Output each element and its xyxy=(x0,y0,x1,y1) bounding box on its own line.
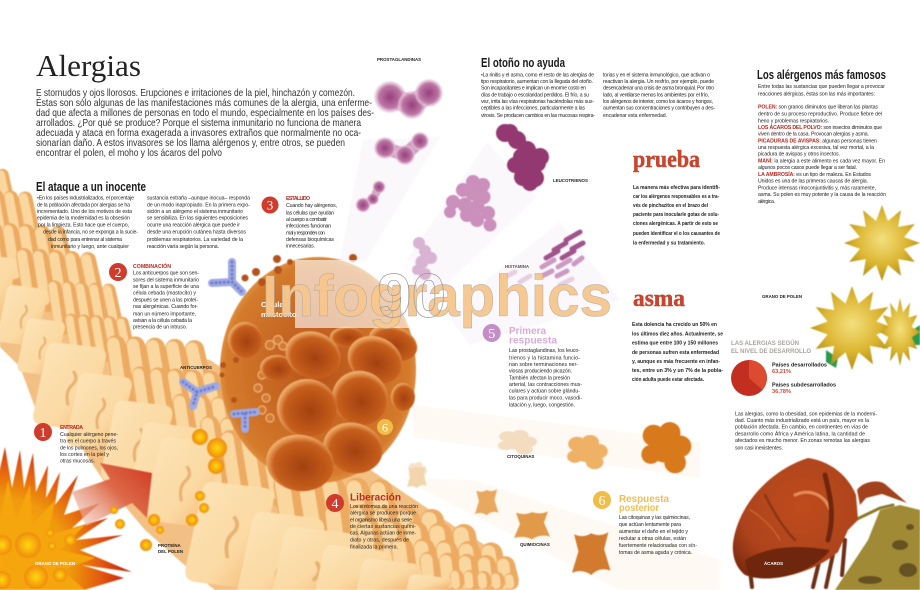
section: El ataque a un inocente: inmunitario y luego, ante cualquier xyxy=(51,244,129,250)
section: El otoño no ayuda: aumentan sus concentraciones y contribuyen a des- xyxy=(603,106,715,112)
section: Los alérgenos más famosos: dentro de su proceso reproductivo. Produce fiebre del xyxy=(758,111,882,117)
step 2: Combinación: COMBINACIÓN xyxy=(133,262,171,270)
step 5: Primera respuesta: También afectan la presión xyxy=(509,375,570,381)
section: El ataque a un inocente: ocurre una reacción alérgica que puede ir xyxy=(147,222,240,228)
pie chart xyxy=(731,360,767,396)
watermark: 90 xyxy=(377,262,446,331)
section: Los alérgenos más famosos: algunos pocos casos puede llegar a ser fatal. xyxy=(758,165,857,171)
section: pie chart by development level: son casi inexistentes. xyxy=(735,445,783,451)
step 3: Estallido: defensas bioquímicas xyxy=(286,237,334,243)
step 4: Liberación: cas. Algunas actúan de inme- xyxy=(350,531,416,537)
section: asma xyxy=(632,286,723,383)
step 3: Estallido: Cuando hay alérgenos, xyxy=(286,203,337,209)
light beams from the mast cell xyxy=(340,137,720,590)
section: El ataque a un inocente: problemas respiratorios. La variedad de la xyxy=(147,237,243,243)
step 5: Primera respuesta: nan sobre terminaciones ner- xyxy=(509,362,578,368)
label: antibodies: ANTICUERPOS xyxy=(180,365,212,370)
section: prueba: la enfermedad y su tratamiento. xyxy=(633,240,705,246)
section: Los alérgenos más famosos: alérgica. xyxy=(758,199,775,205)
section: Los alérgenos más famosos: POLEN: son granos diminutos que liberan las plantas xyxy=(758,105,878,111)
step 3: Estallido xyxy=(262,196,337,250)
intro text xyxy=(36,88,374,159)
section: prueba: pueden identificar el o los causantes de xyxy=(633,231,720,237)
section: asma: los últimos diez años. Actualmente, se xyxy=(632,332,723,338)
step 2: Combinación: célula cebada (mastocito) y xyxy=(133,291,196,297)
section: pie chart by development level: desarrollo como África y América latina, la cantidad de xyxy=(735,430,865,437)
label: right pollen grain: GRANO DE POLEN xyxy=(762,294,802,299)
step 3: Estallido: innecesarias. xyxy=(286,244,315,250)
section: El otoño no ayuda: desencadenar una crisis de asma bronquial. Por otro xyxy=(603,86,714,92)
step 5: Primera respuesta: las para producir moco, vasodi- xyxy=(509,395,582,401)
step 1: Entrada: 1 xyxy=(40,426,46,441)
step 1: Entrada: Cualquier alérgeno pene- xyxy=(60,432,118,438)
step 3: Estallido: ESTALLIDO xyxy=(286,196,310,202)
section: pie chart by development level: LAS ALERGIAS SEGÚN xyxy=(731,340,799,347)
step 3: Estallido: mal y responden con xyxy=(286,231,325,237)
section: pie chart by development level: Las alergias, como la obesidad, son epidemias de la moderni- xyxy=(735,411,877,417)
section: El otoño no ayuda: Son incapacitantes e implican un enorme costo en xyxy=(481,86,586,92)
step 4: Liberación: Los síntomas de una reacción xyxy=(350,504,418,510)
step 4: Liberación: finalizada la primera. xyxy=(350,545,398,551)
section: El ataque a un inocente: incrementado. Uno de los motivos de esta xyxy=(37,209,132,215)
section: prueba: ciones alergénicas. A partir de esto se xyxy=(633,221,718,227)
step 3: Estallido: 3 xyxy=(267,198,273,212)
section: Los alérgenos más famosos: LOS ÁCAROS DEL POLVO: son insectos diminutos que xyxy=(758,124,882,131)
step 5: Primera respuesta: arterial, las contracciones mus- xyxy=(509,382,582,388)
section: El ataque a un inocente: •En los países industrializados, el porcentaje xyxy=(37,196,134,202)
section: El ataque a un inocente: desde una erupción cutánea hasta diversos xyxy=(147,230,246,236)
section: prueba: La manera más efectiva para identifi- xyxy=(633,185,720,191)
section: pie chart by development level xyxy=(731,340,877,451)
section: Los alérgenos más famosos: viven dentro de la casa. Provocan alergias y asma. xyxy=(758,132,869,138)
section: El ataque a un inocente: reacción varía según la persona. xyxy=(147,244,219,250)
section: El otoño no ayuda: vez, irrita las vías respiratorias haciéndolas más sus- xyxy=(481,99,594,105)
label: mast cell xyxy=(261,300,297,319)
section: Los alérgenos más famosos: PICADURAS DE AVISPAS: algunas personas tienen xyxy=(758,138,877,144)
section: El otoño no ayuda: El otoño no ayuda xyxy=(481,56,566,70)
step 6: Respuesta posterior: reclutar a otras células, están xyxy=(619,536,686,542)
illustration: histamine xyxy=(503,232,583,285)
section: El otoño no ayuda: encadenar esta enfermedad. xyxy=(603,113,667,119)
section: Los alérgenos más famosos xyxy=(757,68,886,205)
section: El otoño no ayuda: días de trabajo o escolaridad perdidos. El frío, a su xyxy=(481,92,589,98)
section: asma: de personas sufren esta enfermedad xyxy=(632,350,720,356)
step 5: Primera respuesta: trienos y la histamina funcio- xyxy=(509,355,580,361)
section: Los alérgenos más famosos: reacciones alérgicas, éstas son las más importantes: xyxy=(758,92,875,98)
section: El ataque a un inocente: de la población afectada por alergias se ha xyxy=(37,202,130,208)
label: mast cell: Célula xyxy=(261,300,284,309)
label: histamine: HISTAMINA xyxy=(505,264,530,269)
step 1: Entrada: de los pulmones, los ojos, xyxy=(60,445,118,451)
label: leukotrienes: LEUCOTRIENOS xyxy=(553,178,588,183)
section: El otoño no ayuda xyxy=(481,56,715,119)
step 4: Liberación: diato y otras, después de xyxy=(350,537,409,543)
step 4: Liberación: de ciertas sustancias quími- xyxy=(350,524,416,530)
section: Los alérgenos más famosos: Produce intensas rinoconjuntivitis y, más raramente, xyxy=(758,185,876,191)
section: El otoño no ayuda: los alérgenos de interior, como los ácaros y hongos, xyxy=(603,99,713,105)
section: asma: estima que entre 100 y 150 millones xyxy=(632,340,718,346)
step 4: Liberación: alérgica se producen porque xyxy=(350,511,416,517)
illustration: leukotrienes xyxy=(412,124,549,280)
watermark: Infographics xyxy=(262,264,612,329)
step 5: Primera respuesta: 5 xyxy=(488,327,495,342)
section: El ataque a un inocente: El ataque a un inocente xyxy=(36,180,146,194)
intro text: sionarían daño. A estos invasores se los llama alérgenos y, entre otros, se pueden xyxy=(36,138,345,149)
section: prueba: car los alérgenos responsables es a tra- xyxy=(633,194,719,200)
section: El ataque a un inocente: epidemia de la modernidad es la obsesión xyxy=(37,216,130,222)
section: asma: y, aunque es más frecuente en infan- xyxy=(632,359,720,365)
title: Alergias xyxy=(36,48,141,83)
step 2: Combinación xyxy=(109,262,199,331)
step 3: Estallido: las células que ayudan xyxy=(286,210,334,216)
step 6: Respuesta posterior: 6 xyxy=(598,494,606,509)
intro text: E stornudos y ojos llorosos. Erupciones e irritaciones de la piel, hinchazón y comezón. xyxy=(36,88,355,99)
intro text: Éstas son sólo algunas de las manifestaciones más comunes de la alergia, una enferme- xyxy=(36,96,372,109)
section: pie chart by development level: 36,78% xyxy=(772,389,791,395)
section: Los alérgenos más famosos: Entre todas las sustancias que pueden llegar a provocar xyxy=(758,84,885,90)
section: El ataque a un inocente: por la limpieza. Esto hace que el cuerpo, xyxy=(38,222,129,228)
step 2: Combinación: Los anticuerpos que son sen- xyxy=(133,271,199,277)
section: El ataque a un inocente: se sensibiliza. En las siguientes exposiciones xyxy=(147,216,248,222)
step 2: Combinación: presencia de un intruso. xyxy=(133,325,187,331)
section: pie chart by development level: EL NIVEL DE DESARROLLO xyxy=(731,349,811,355)
step 4: Liberación: 4 xyxy=(332,497,338,512)
section: Los alérgenos más famosos: una respuesta alérgica excesiva, tal vez mortal, a la xyxy=(758,145,874,151)
step 2: Combinación: nas alergénicas. Cuando for- xyxy=(133,304,198,310)
intro text: encontrar el polen, el moho y los ácaros del polvo xyxy=(36,148,222,159)
section: pie chart by development level: población afectada. En cambio, en continentes en vías de xyxy=(735,425,868,431)
step 1: Entrada: otras mucosas. xyxy=(60,459,95,465)
step 4: Liberación: el organismo libera una serie xyxy=(350,517,412,523)
step 1: Entrada: tra en el cuerpo a través xyxy=(60,439,116,445)
step 6: Respuesta posterior: aumentar el daño en el tejido y xyxy=(619,529,688,535)
section: prueba: paciente para inocularle gotas de solu- xyxy=(633,212,719,218)
label: pollen protein: DEL POLEN xyxy=(158,549,183,554)
label: mast cell: mastocito xyxy=(261,310,297,319)
intro text: arrollados. ¿Por qué se produce? Porque el sistema inmunitario no funciona de manera xyxy=(36,118,361,129)
section: El otoño no ayuda: •La rinitis y el asma, como el resto de las alergias de xyxy=(481,72,594,78)
section: El otoño no ayuda: lado, al ventilarse menos los ambientes por el frío, xyxy=(603,92,709,98)
label: pollen protein xyxy=(158,543,183,554)
small step marker 6 on mast cell xyxy=(377,419,393,435)
illustration: epithelial tissue cells xyxy=(0,170,512,590)
step 2: Combinación: sores del sistema inmunitario xyxy=(133,277,199,283)
illustration: dust mite on plant xyxy=(733,458,920,590)
section: pie chart by development level: afectados es mucho menor. En zonas remotas las alergias xyxy=(735,438,870,444)
section: asma: asma xyxy=(633,286,685,312)
step 1: Entrada: ENTRADA xyxy=(60,425,83,431)
step 6: Respuesta posterior: tomas de asma aguda y crónica. xyxy=(619,550,692,556)
section: Los alérgenos más famosos: heno y problemas respiratorios. xyxy=(758,118,829,124)
section: El otoño no ayuda: virosis. Se producen cambios en las mucosas respira- xyxy=(481,113,595,119)
label: chemokines: QUIMIOCINAS xyxy=(520,542,550,547)
section: El otoño no ayuda: torias y en el sistema inmunológico, que activan o xyxy=(603,72,710,78)
section: asma: Esta dolencia ha crecido un 50% en xyxy=(632,322,718,328)
step 6: Respuesta posterior: Las citoquinas y las quimiocinas, xyxy=(619,515,690,521)
step 2: Combinación: man un número importante, xyxy=(133,311,196,317)
section: Los alérgenos más famosos: Unidos es una de las primeras causas de alergia. xyxy=(758,179,868,185)
label: pollen grain: GRANO DE POLEN xyxy=(35,561,75,566)
section: El otoño no ayuda: tipo respiratorio, aumentan con la llegada del otoño. xyxy=(481,79,593,85)
step 2: Combinación: se fijan a la superficie de una xyxy=(133,284,199,290)
step 6: Respuesta posterior: Respuesta xyxy=(619,494,669,505)
step 6: Respuesta posterior xyxy=(593,491,697,556)
section: El ataque a un inocente: desde la infancia, no se exponga a la sucie- xyxy=(43,230,138,236)
section: asma: tes, entre un 3% y un 7% de la pobla- xyxy=(632,368,723,374)
illustration: antibodies xyxy=(183,262,256,429)
section: prueba: vés de pinchazitos en el brazo del xyxy=(633,203,708,209)
step 6: Respuesta posterior: que actúan lentamente para xyxy=(619,522,681,528)
step 2: Combinación: 2 xyxy=(114,266,122,281)
intro text: dad que afecta a millones de personas en todo el mundo, especialmente en los países des- xyxy=(36,108,374,119)
step 4: Liberación xyxy=(326,492,418,551)
section: El otoño no ayuda: ceptibles a las infecciones, particularmente a las xyxy=(481,106,585,112)
label: prostaglandins: PROSTAGLANDINAS xyxy=(377,57,421,62)
illustration: yellow pollen grains, right xyxy=(810,205,920,370)
section: El ataque a un inocente: sición a un alérgeno el sistema inmunitario xyxy=(147,209,243,215)
section: El ataque a un inocente xyxy=(36,180,250,250)
label: pollen protein: PROTEÍNA xyxy=(158,543,182,548)
section: El ataque a un inocente: de un modo inapropiado. En la primera expo- xyxy=(147,202,250,208)
step 5: Primera respuesta: Las prostaglandinas, los leuco- xyxy=(509,348,580,354)
step 6: Respuesta posterior: posterior xyxy=(619,503,659,514)
step 3: Estallido: infecciones funcionan xyxy=(286,224,331,230)
step 1: Entrada: los cortes en la piel y xyxy=(60,452,109,458)
section: pie chart by development level: dad. Cuanto más industrializado está un país, mayor es la xyxy=(735,418,869,424)
step 3: Estallido: al cuerpo a combatir xyxy=(286,217,327,223)
step 5: Primera respuesta: respuesta xyxy=(509,336,557,346)
illustration: chemokines xyxy=(407,466,611,575)
section: prueba xyxy=(633,147,720,246)
step 2: Combinación: avisan a la célula cebada la xyxy=(133,318,192,324)
section: El ataque a un inocente: sustancia extraña –aunque inocua– responda xyxy=(147,196,250,202)
section: pie chart by development level: Países desarrollados xyxy=(772,362,827,368)
illustration: cytokines xyxy=(408,422,691,481)
step 6: Respuesta posterior: fuertemente relacionadas con sín- xyxy=(619,543,697,549)
small step marker 6 on mast cell: 6 xyxy=(382,420,388,434)
step 5: Primera respuesta: viosas produciendo picazón. xyxy=(509,369,572,375)
label: cytokines: CITOQUINAS xyxy=(507,454,535,459)
section: Los alérgenos más famosos: picadura de avispas y otros insectos. xyxy=(758,152,840,158)
step 5: Primera respuesta: Primera xyxy=(509,326,546,337)
section: prueba: prueba xyxy=(633,147,700,173)
pale panel over mast cell xyxy=(295,260,413,328)
section: El ataque a un inocente: dad como para entrenar al sistema xyxy=(48,237,122,243)
step 5: Primera respuesta: latación y, luego, congestión. xyxy=(509,402,575,408)
illustration: prostaglandins xyxy=(356,79,443,212)
step 1: Entrada xyxy=(34,423,118,465)
step 5: Primera respuesta: culares y actúan sobre glándu- xyxy=(509,389,580,395)
section: pie chart by development level: Países subdesarrollados xyxy=(772,382,836,388)
section: Los alérgenos más famosos: MANÍ: la alergia a este alimento es cada vez mayor. En xyxy=(758,156,885,164)
section: Los alérgenos más famosos: LA AMBROSÍA: es un tipo de maleza. En Estados xyxy=(758,170,871,178)
arrow: allergen entering the body xyxy=(72,463,152,526)
step 4: Liberación: Liberación xyxy=(350,492,401,504)
illustration: pollen proteins xyxy=(46,429,227,551)
illustration: pollen grain, bottom left xyxy=(0,447,132,590)
step 5: Primera respuesta xyxy=(483,324,582,408)
step 2: Combinación: después se unen a las proteí- xyxy=(133,297,198,303)
intro text: adecuada y ataca en forma exagerada a invasores extraños que normalmente no oca- xyxy=(36,128,361,139)
section: El otoño no ayuda: reactivan la alergia. Un resfrío, por ejemplo, puede xyxy=(603,79,714,85)
label: mites: ÁCAROS xyxy=(764,561,783,566)
illustration: mast cell xyxy=(220,254,422,496)
section: pie chart by development level: 63,21% xyxy=(772,369,791,375)
section: Los alérgenos más famosos: asma. Su polen es muy potente y la causa de la reacción xyxy=(758,192,886,198)
section: asma: ción adulta puede estar afectada. xyxy=(632,377,704,383)
